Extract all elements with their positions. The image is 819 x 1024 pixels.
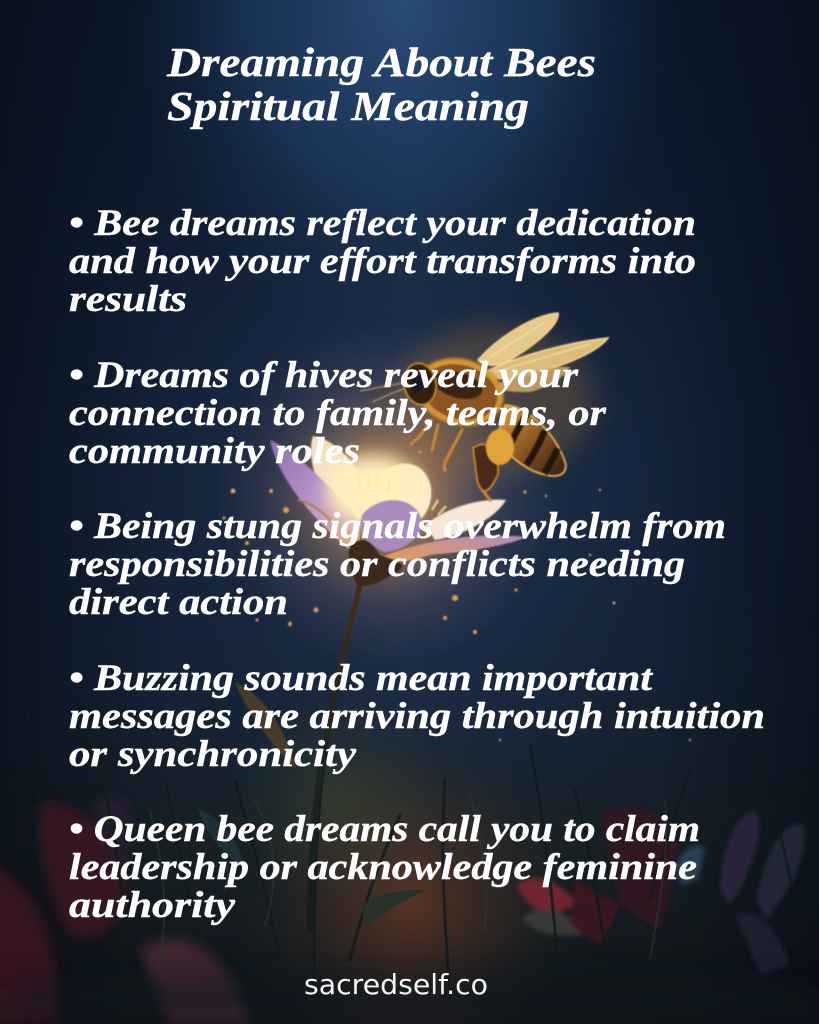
bullet: queen bee: leadership or acknowledge feminine [69,846,697,887]
bullet: buzzing: or synchronicity [69,733,357,774]
bullet: dedication: • Bee dreams reflect your dedication [69,202,696,243]
bullet: stung [69,505,726,622]
bullet list [69,202,765,925]
lower right purple petal [380,536,527,562]
stem leaf [235,682,296,770]
bullet: dedication: and how your effort transforms into [69,240,696,281]
title: Dreaming About Bees [166,39,596,85]
ground shadow [0,970,819,1024]
illustration: glowing flower [180,300,691,930]
illustration: bee [360,313,608,500]
bullet: buzzing: messages are arriving through intuition [69,695,765,736]
bullet: stung: direct action [69,581,288,622]
flower stem [310,572,363,930]
thorax [416,356,504,428]
stamens [358,472,446,515]
bullet: dedication [69,202,696,319]
bullet: stung: • Being stung signals overwhelm from [69,505,726,546]
head [401,361,439,407]
bullet: dedication: results [69,278,187,319]
particles [222,450,691,741]
right white petal [425,500,506,540]
rear leg [473,444,498,491]
leaf shapes [360,890,427,925]
front petal [361,500,422,552]
left purple petal [270,440,360,552]
bullet: queen bee: authority [69,884,236,925]
red flower right [517,807,680,945]
title [166,39,596,129]
back petals [311,436,382,521]
bullet: buzzing [69,657,765,774]
calyx [348,540,402,586]
thorax fuzz [409,349,511,435]
bullet: stung: responsibilities or conflicts needing [69,543,685,584]
glow core [326,456,418,524]
bullet: queen bee [69,808,700,925]
bullet: buzzing: • Buzzing sounds mean important [69,657,654,698]
red flower left [0,796,250,1024]
grass blades [24,600,790,1000]
gold petal edge [298,500,332,522]
website footer: sacredself.co [304,968,488,1001]
antennae [360,382,412,402]
title: Spiritual Meaning [167,83,529,129]
bullet: hives [69,354,607,471]
bullet: hives: community roles [69,430,360,471]
bee glow [395,325,595,475]
wings [478,313,608,392]
purple petals right [674,811,805,975]
abdomen [498,405,566,476]
pollen belly [486,429,514,465]
eye [411,375,423,393]
bullet: queen bee: • Queen bee dreams call you to claim [69,808,700,849]
bullet: hives: • Dreams of hives reveal your [69,354,579,395]
legs [411,420,490,500]
bullet: hives: connection to family, teams, or [69,392,607,433]
